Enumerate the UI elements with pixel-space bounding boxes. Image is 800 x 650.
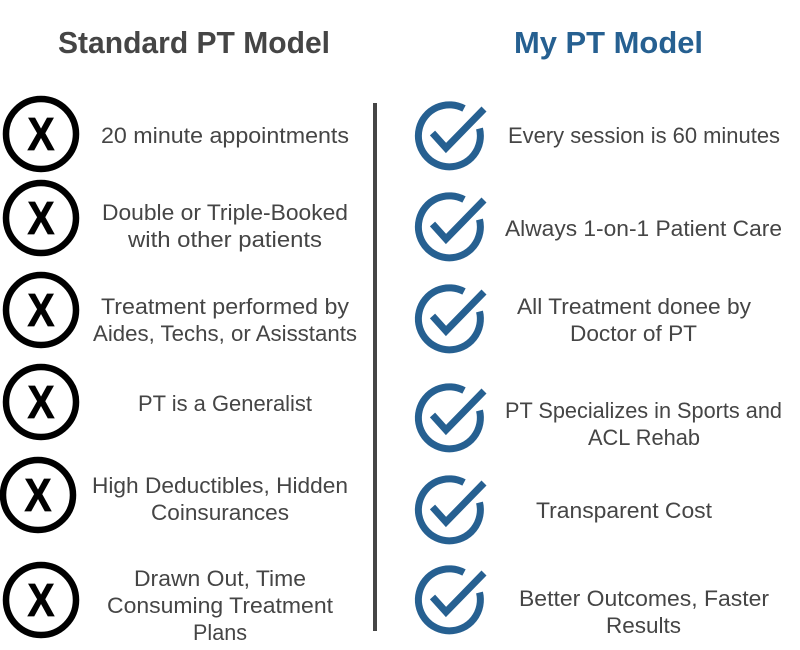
text: PT is a generalist: PT is a Generalist xyxy=(138,391,313,416)
my PT row 6 xyxy=(418,569,770,638)
text: PT specializes: ACL Rehab xyxy=(588,425,700,450)
icon: X in circle: X xyxy=(24,469,52,521)
icon: X in circle: X xyxy=(28,108,55,160)
text: high deductibles xyxy=(92,473,348,525)
my PT row 4 xyxy=(418,387,782,450)
text: drawn out treatment plans: Consuming Treatment xyxy=(107,593,334,618)
icon: X in circle: X xyxy=(28,574,55,626)
text: treatment performed by: Aides, Techs, or Asisstants xyxy=(93,321,357,346)
icon: X in circle xyxy=(6,367,76,437)
icon: X in circle xyxy=(6,183,76,253)
standard row 3 xyxy=(6,275,357,346)
text: better outcomes xyxy=(519,586,770,638)
icon: X in circle xyxy=(6,99,76,169)
my PT row 3 xyxy=(418,288,752,350)
text: always 1-on-1: Always 1-on-1 Patient Care xyxy=(505,216,782,241)
icon: check in circle xyxy=(418,196,484,258)
text: treatment performed by: Treatment performed by xyxy=(101,294,350,319)
icon: check in circle xyxy=(418,105,484,167)
standard row 6 xyxy=(6,565,334,645)
text: double or triple-booked: Double or Triple-Booked xyxy=(102,200,348,225)
text: every session: Every session is 60 minutes xyxy=(508,123,780,148)
icon: X in circle: X xyxy=(28,376,55,428)
standard row 5 xyxy=(3,460,348,530)
text: better outcomes: Results xyxy=(606,613,681,638)
icon: check in circle xyxy=(418,569,484,631)
text: double or triple-booked xyxy=(102,200,348,252)
text: all treatment: All Treatment donee by xyxy=(517,294,752,319)
icon: X in circle xyxy=(3,460,73,530)
icon: X in circle xyxy=(6,565,76,635)
text: all treatment xyxy=(517,294,752,346)
text: better outcomes: Better Outcomes, Faster xyxy=(519,586,770,611)
my PT row 2 xyxy=(418,196,782,258)
standard row 4 xyxy=(6,367,313,437)
text: high deductibles: High Deductibles, Hidden xyxy=(92,473,348,498)
text: drawn out treatment plans xyxy=(107,566,334,645)
text: drawn out treatment plans: Plans xyxy=(193,620,247,645)
my PT row 1 xyxy=(418,105,780,167)
text: drawn out treatment plans: Drawn Out, Time xyxy=(134,566,306,591)
center divider xyxy=(373,103,377,631)
text: double or triple-booked: with other patients xyxy=(127,227,322,252)
text: PT specializes: PT Specializes in Sports and xyxy=(505,398,782,423)
text: 20 minute appointments: 20 minute appointments xyxy=(101,123,349,148)
heading: My PT Model: My PT Model xyxy=(514,25,703,60)
text: PT specializes xyxy=(505,398,782,450)
heading: Standard PT Model: Standard PT Model xyxy=(58,25,330,60)
icon: check in circle xyxy=(418,387,484,449)
icon: X in circle xyxy=(6,275,76,345)
text: high deductibles: Coinsurances xyxy=(151,500,289,525)
standard row 2 xyxy=(6,183,348,253)
text: all treatment: Doctor of PT xyxy=(570,321,697,346)
standard row 1 xyxy=(6,99,349,169)
icon: check in circle xyxy=(418,288,484,350)
icon: X in circle: X xyxy=(28,192,55,244)
text: transparent cost: Transparent Cost xyxy=(536,498,713,523)
my PT row 5 xyxy=(418,479,713,541)
icon: check in circle xyxy=(418,479,484,541)
text: treatment performed by xyxy=(93,294,357,346)
icon: X in circle: X xyxy=(28,284,55,336)
